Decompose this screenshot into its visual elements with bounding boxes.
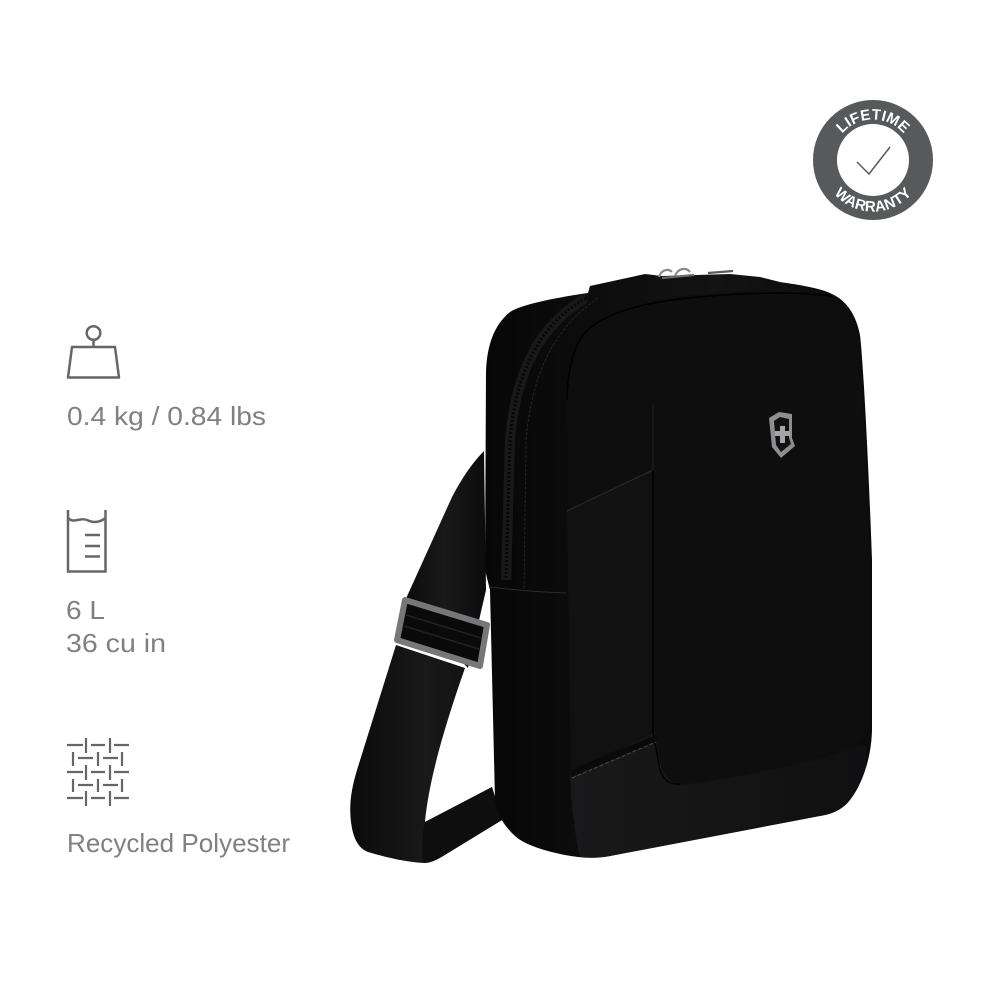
- icon: woven fabric: [67, 738, 129, 806]
- icon: check mark: [857, 147, 890, 174]
- pocket diagonal opening: [567, 470, 653, 772]
- zipper track: [506, 298, 598, 590]
- bag body: [485, 274, 872, 858]
- capacity label: 6 L: [66, 595, 105, 625]
- icon: beaker: [68, 510, 106, 572]
- strap buckle: [397, 600, 487, 666]
- stitched leather trim: [571, 735, 657, 777]
- weight specification: [67, 326, 266, 431]
- badge: lifetime warranty: [813, 100, 933, 220]
- capacity specification: [66, 510, 166, 658]
- material specification: [67, 738, 290, 858]
- capacity imperial label: 36 cu in: [66, 628, 166, 658]
- zipper pulls: [659, 269, 733, 278]
- material label: Recycled Polyester: [67, 828, 290, 858]
- logo: shield badge: [769, 412, 795, 458]
- icon: weight: [68, 326, 119, 378]
- badge top text: LIFETIME: [836, 109, 910, 134]
- leather base panel: [570, 732, 867, 858]
- badge bottom text: WARRANTY: [836, 186, 910, 212]
- front panel: [653, 292, 870, 784]
- side lower seam: [490, 587, 566, 593]
- side pocket panel: [567, 297, 670, 772]
- product: black crossbody bag: [350, 269, 872, 863]
- weight label: 0.4 kg / 0.84 lbs: [67, 401, 266, 431]
- shoulder strap: [350, 451, 502, 863]
